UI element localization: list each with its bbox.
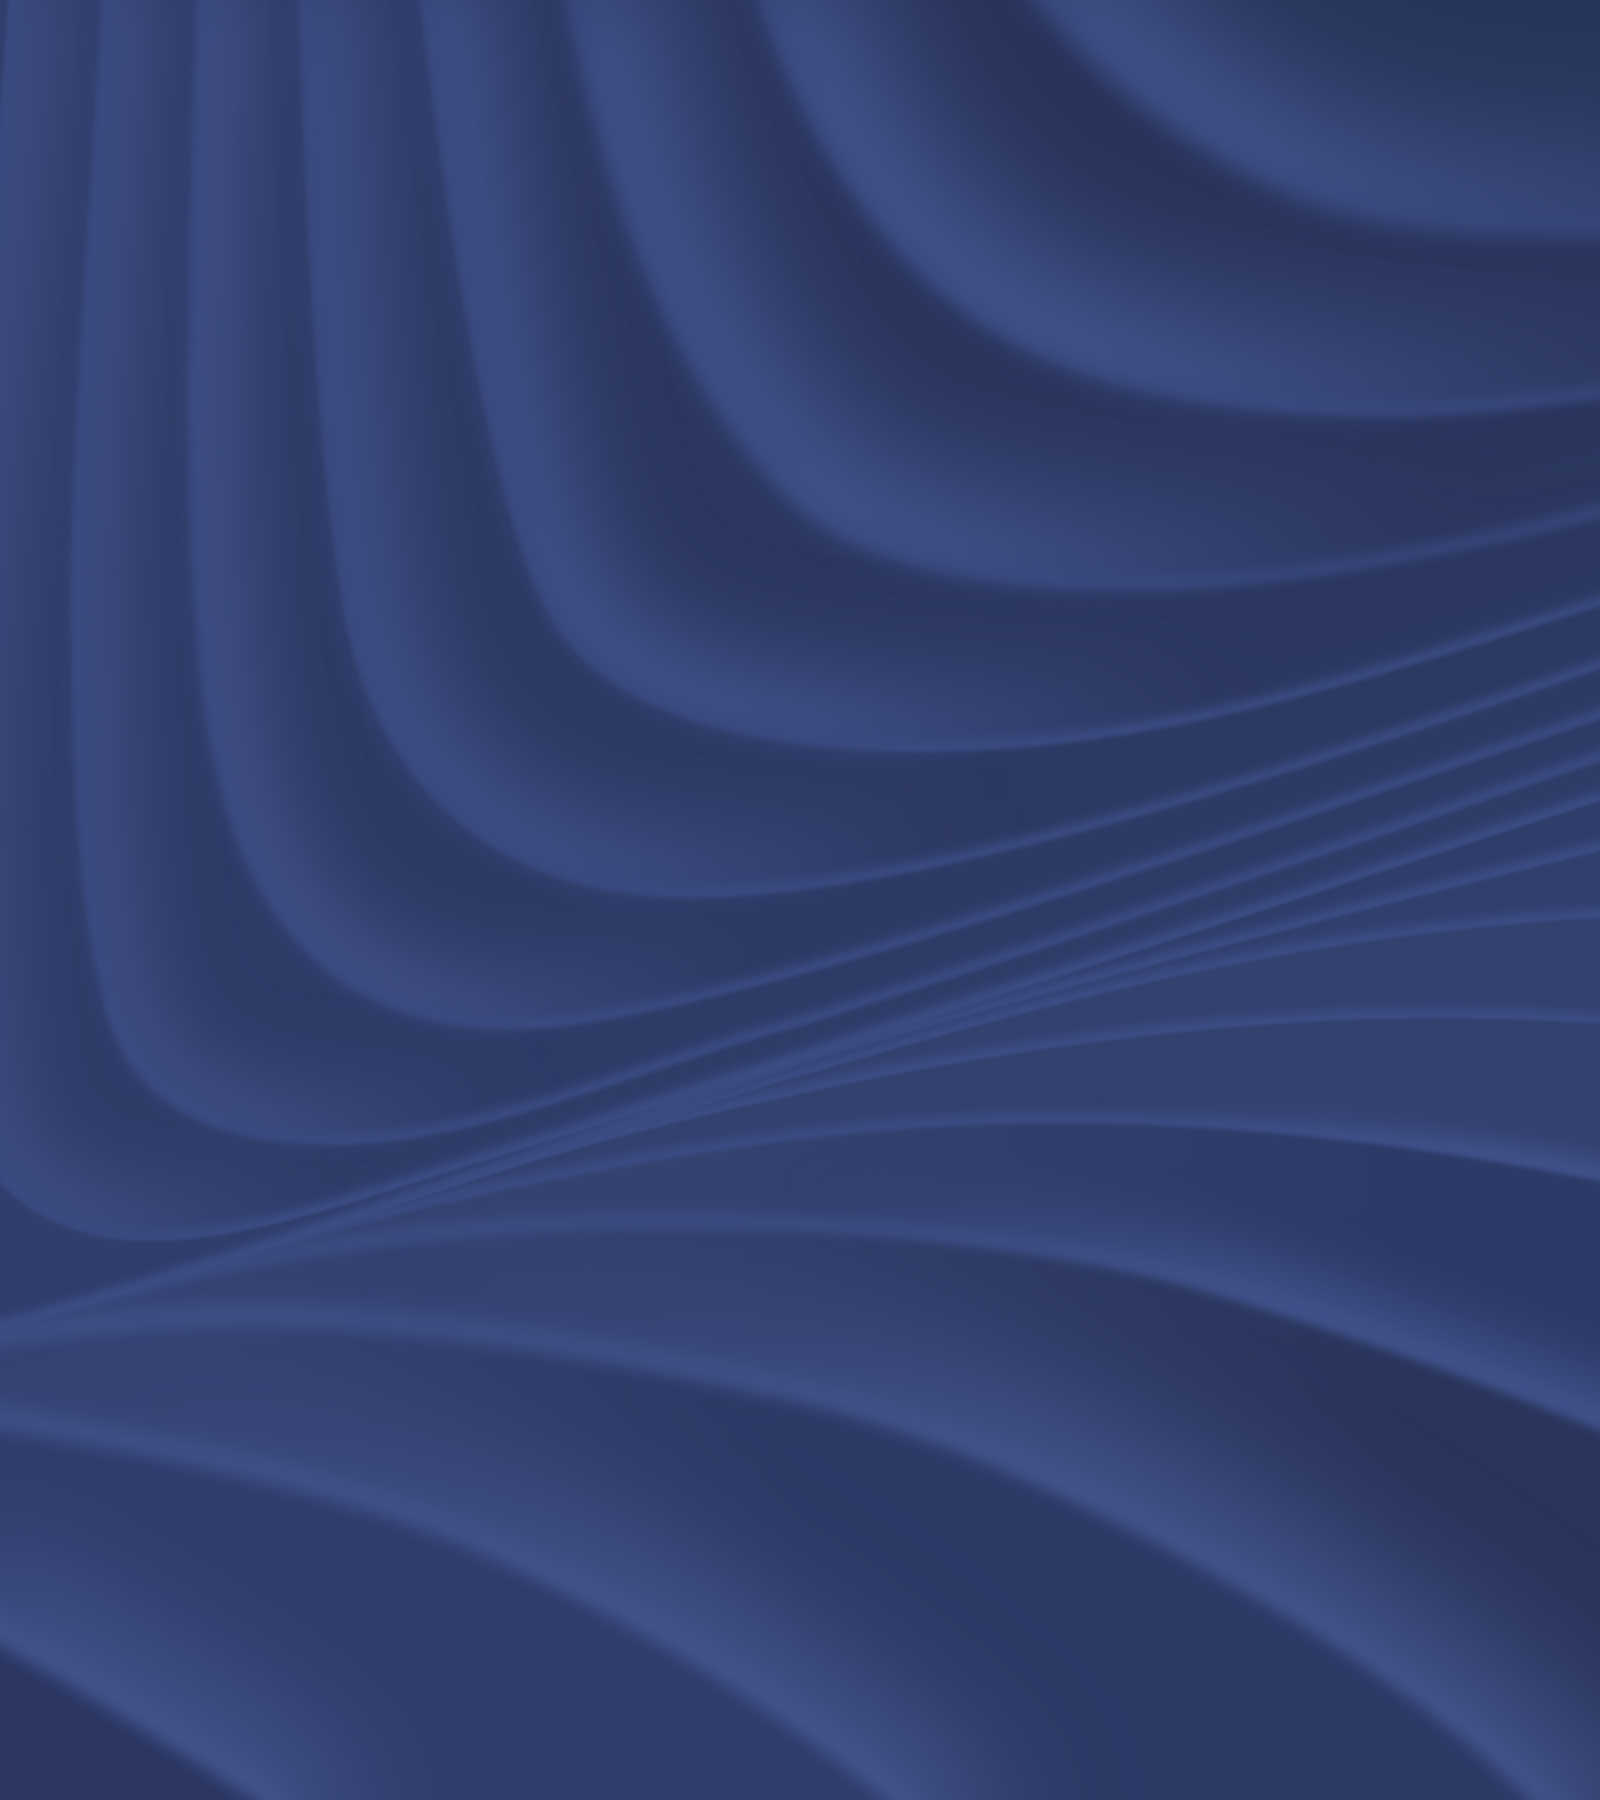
- fold 15: bottom-left corner wave: [0, 1436, 874, 1800]
- fold 6: second curtain fold: [71, 0, 1600, 1145]
- fold 2: sixth curtain fold: [560, 0, 1600, 590]
- fold 9: fan line nine: [0, 0, 1600, 1350]
- fold 5: third curtain fold: [187, 0, 1600, 1030]
- fold 14: long lower wave: [0, 1393, 978, 1800]
- fold 10: fan line ten: [565, 1007, 1600, 1152]
- fold 0: top-right curtain fold: [1010, 0, 1600, 238]
- fold 13: lower right diagonal wave: [0, 1254, 1600, 1800]
- fold 1: seventh curtain fold: [748, 0, 1600, 416]
- fold 3: fifth curtain fold: [415, 0, 1600, 752]
- fold 12: mid hump wave: [188, 1128, 1600, 1434]
- fold 4: fourth curtain fold: [297, 0, 1600, 898]
- fold 7: leftmost curtain fold: [0, 0, 1600, 1241]
- fold 8: fan line eight: [0, 0, 1600, 1350]
- fold 11: upper hump wave: [294, 1105, 1600, 1242]
